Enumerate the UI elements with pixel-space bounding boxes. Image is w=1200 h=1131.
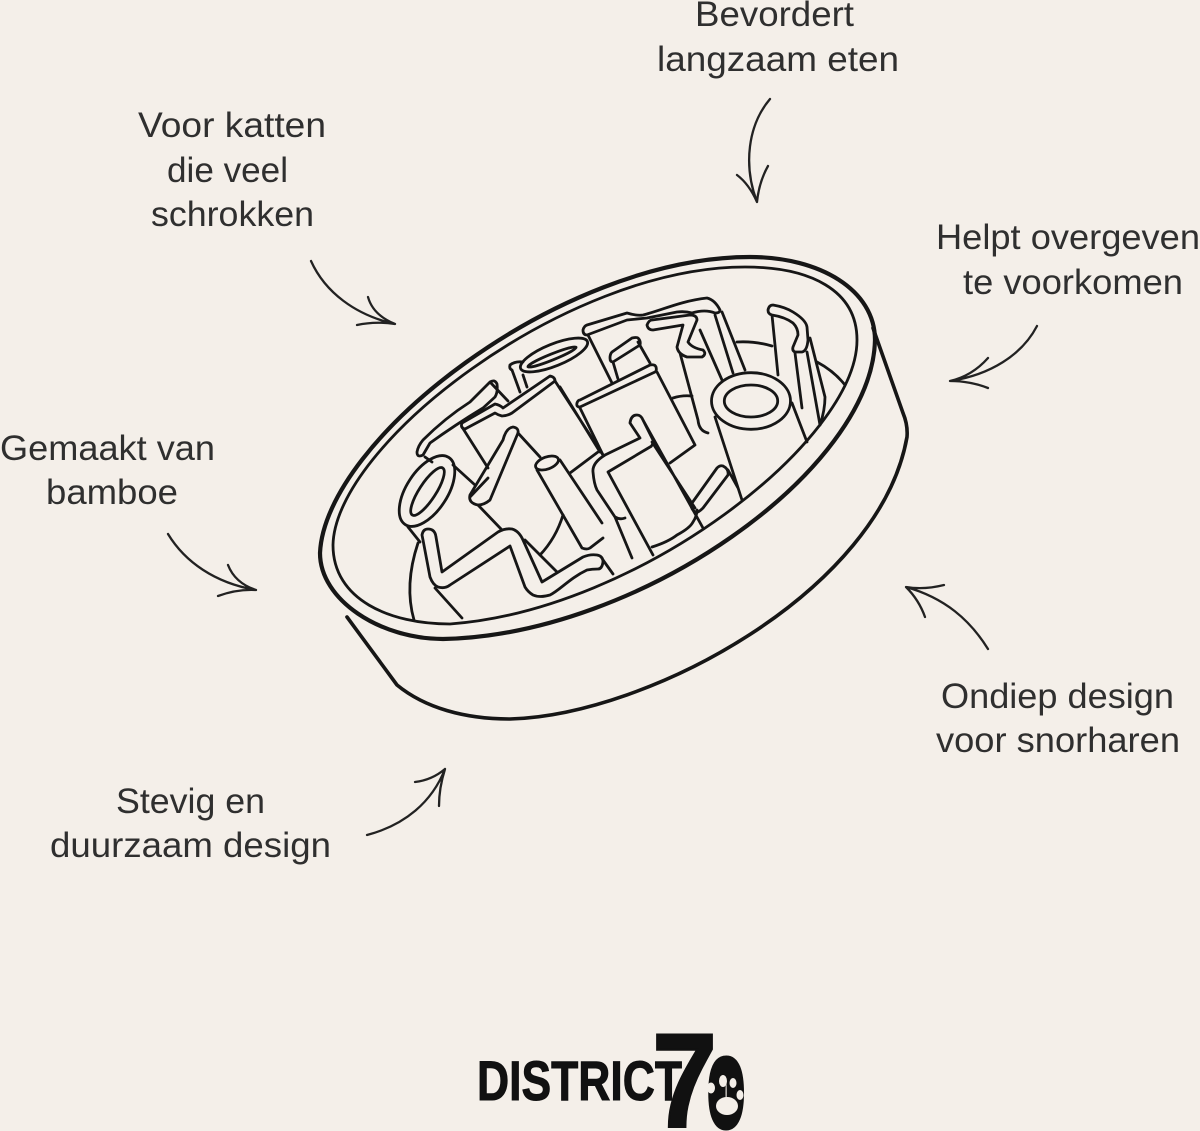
right finger — [768, 305, 825, 425]
label: Ondiep design voor snorharen: voor snorharen — [936, 721, 1180, 760]
rear wavy ridge stems — [588, 312, 745, 383]
stepped ridge — [461, 376, 555, 429]
label: Gemaakt van bamboe: Gemaakt van — [0, 429, 215, 468]
arrow: upper left — [311, 261, 395, 325]
Z ridge — [647, 315, 708, 433]
bowl rim — [320, 257, 875, 639]
label: Stevig en duurzaam design — [50, 782, 331, 865]
small stem — [510, 362, 527, 392]
maze lines near zigzag — [435, 540, 613, 618]
rear block lines — [462, 381, 603, 523]
label: Voor katten die veel schrokken — [138, 106, 326, 234]
bowl illustration — [320, 257, 907, 719]
small upper block — [610, 338, 650, 379]
arrow: top — [737, 99, 770, 202]
icon: paw — [707, 1075, 744, 1115]
L ridge centre — [593, 415, 703, 558]
arrow: left — [168, 534, 256, 596]
centre finger — [470, 427, 518, 505]
label: Stevig en duurzaam design: Stevig en — [116, 782, 265, 821]
label: Helpt overgeven te voorkomen: Helpt overgeven — [936, 218, 1200, 257]
small cylinder — [534, 453, 603, 549]
label: Ondiep design voor snorharen: Ondiep design — [941, 677, 1174, 716]
label: Gemaakt van bamboe: bamboe — [46, 473, 178, 512]
label: Bevordert langzaam eten: langzaam eten — [657, 40, 899, 79]
arrow: lower right — [906, 585, 988, 649]
maze ridge: bottom zigzag — [422, 529, 603, 596]
small finger — [691, 466, 728, 512]
ring cylinder — [712, 373, 807, 500]
arrow: lower left — [367, 769, 445, 835]
label: Bevordert langzaam eten — [657, 0, 899, 79]
arrow: upper right — [950, 326, 1037, 388]
inner floor arcs — [410, 342, 845, 620]
flat cylinder — [517, 331, 591, 379]
label: Ondiep design voor snorharen — [936, 677, 1180, 760]
label: Helpt overgeven te voorkomen: te voorkomen — [963, 263, 1183, 302]
logo: District 70 — [477, 1005, 744, 1131]
long finger ridge — [417, 381, 508, 456]
label: Gemaakt van bamboe — [0, 429, 215, 512]
label: Voor katten die veel schrokken: die veel — [167, 151, 288, 190]
maze ridge: left ring — [388, 446, 502, 542]
label: Stevig en duurzaam design: duurzaam design — [50, 826, 331, 865]
logo wordmark: DISTRICT — [477, 1049, 682, 1112]
label: Helpt overgeven te voorkomen — [936, 218, 1200, 302]
centre block — [577, 365, 695, 463]
bowl outer wall — [347, 328, 907, 719]
label: Voor katten die veel schrokken: Voor katten — [138, 106, 326, 145]
label: Voor katten die veel schrokken: schrokken — [151, 195, 314, 234]
top wavy ridge — [583, 298, 720, 335]
